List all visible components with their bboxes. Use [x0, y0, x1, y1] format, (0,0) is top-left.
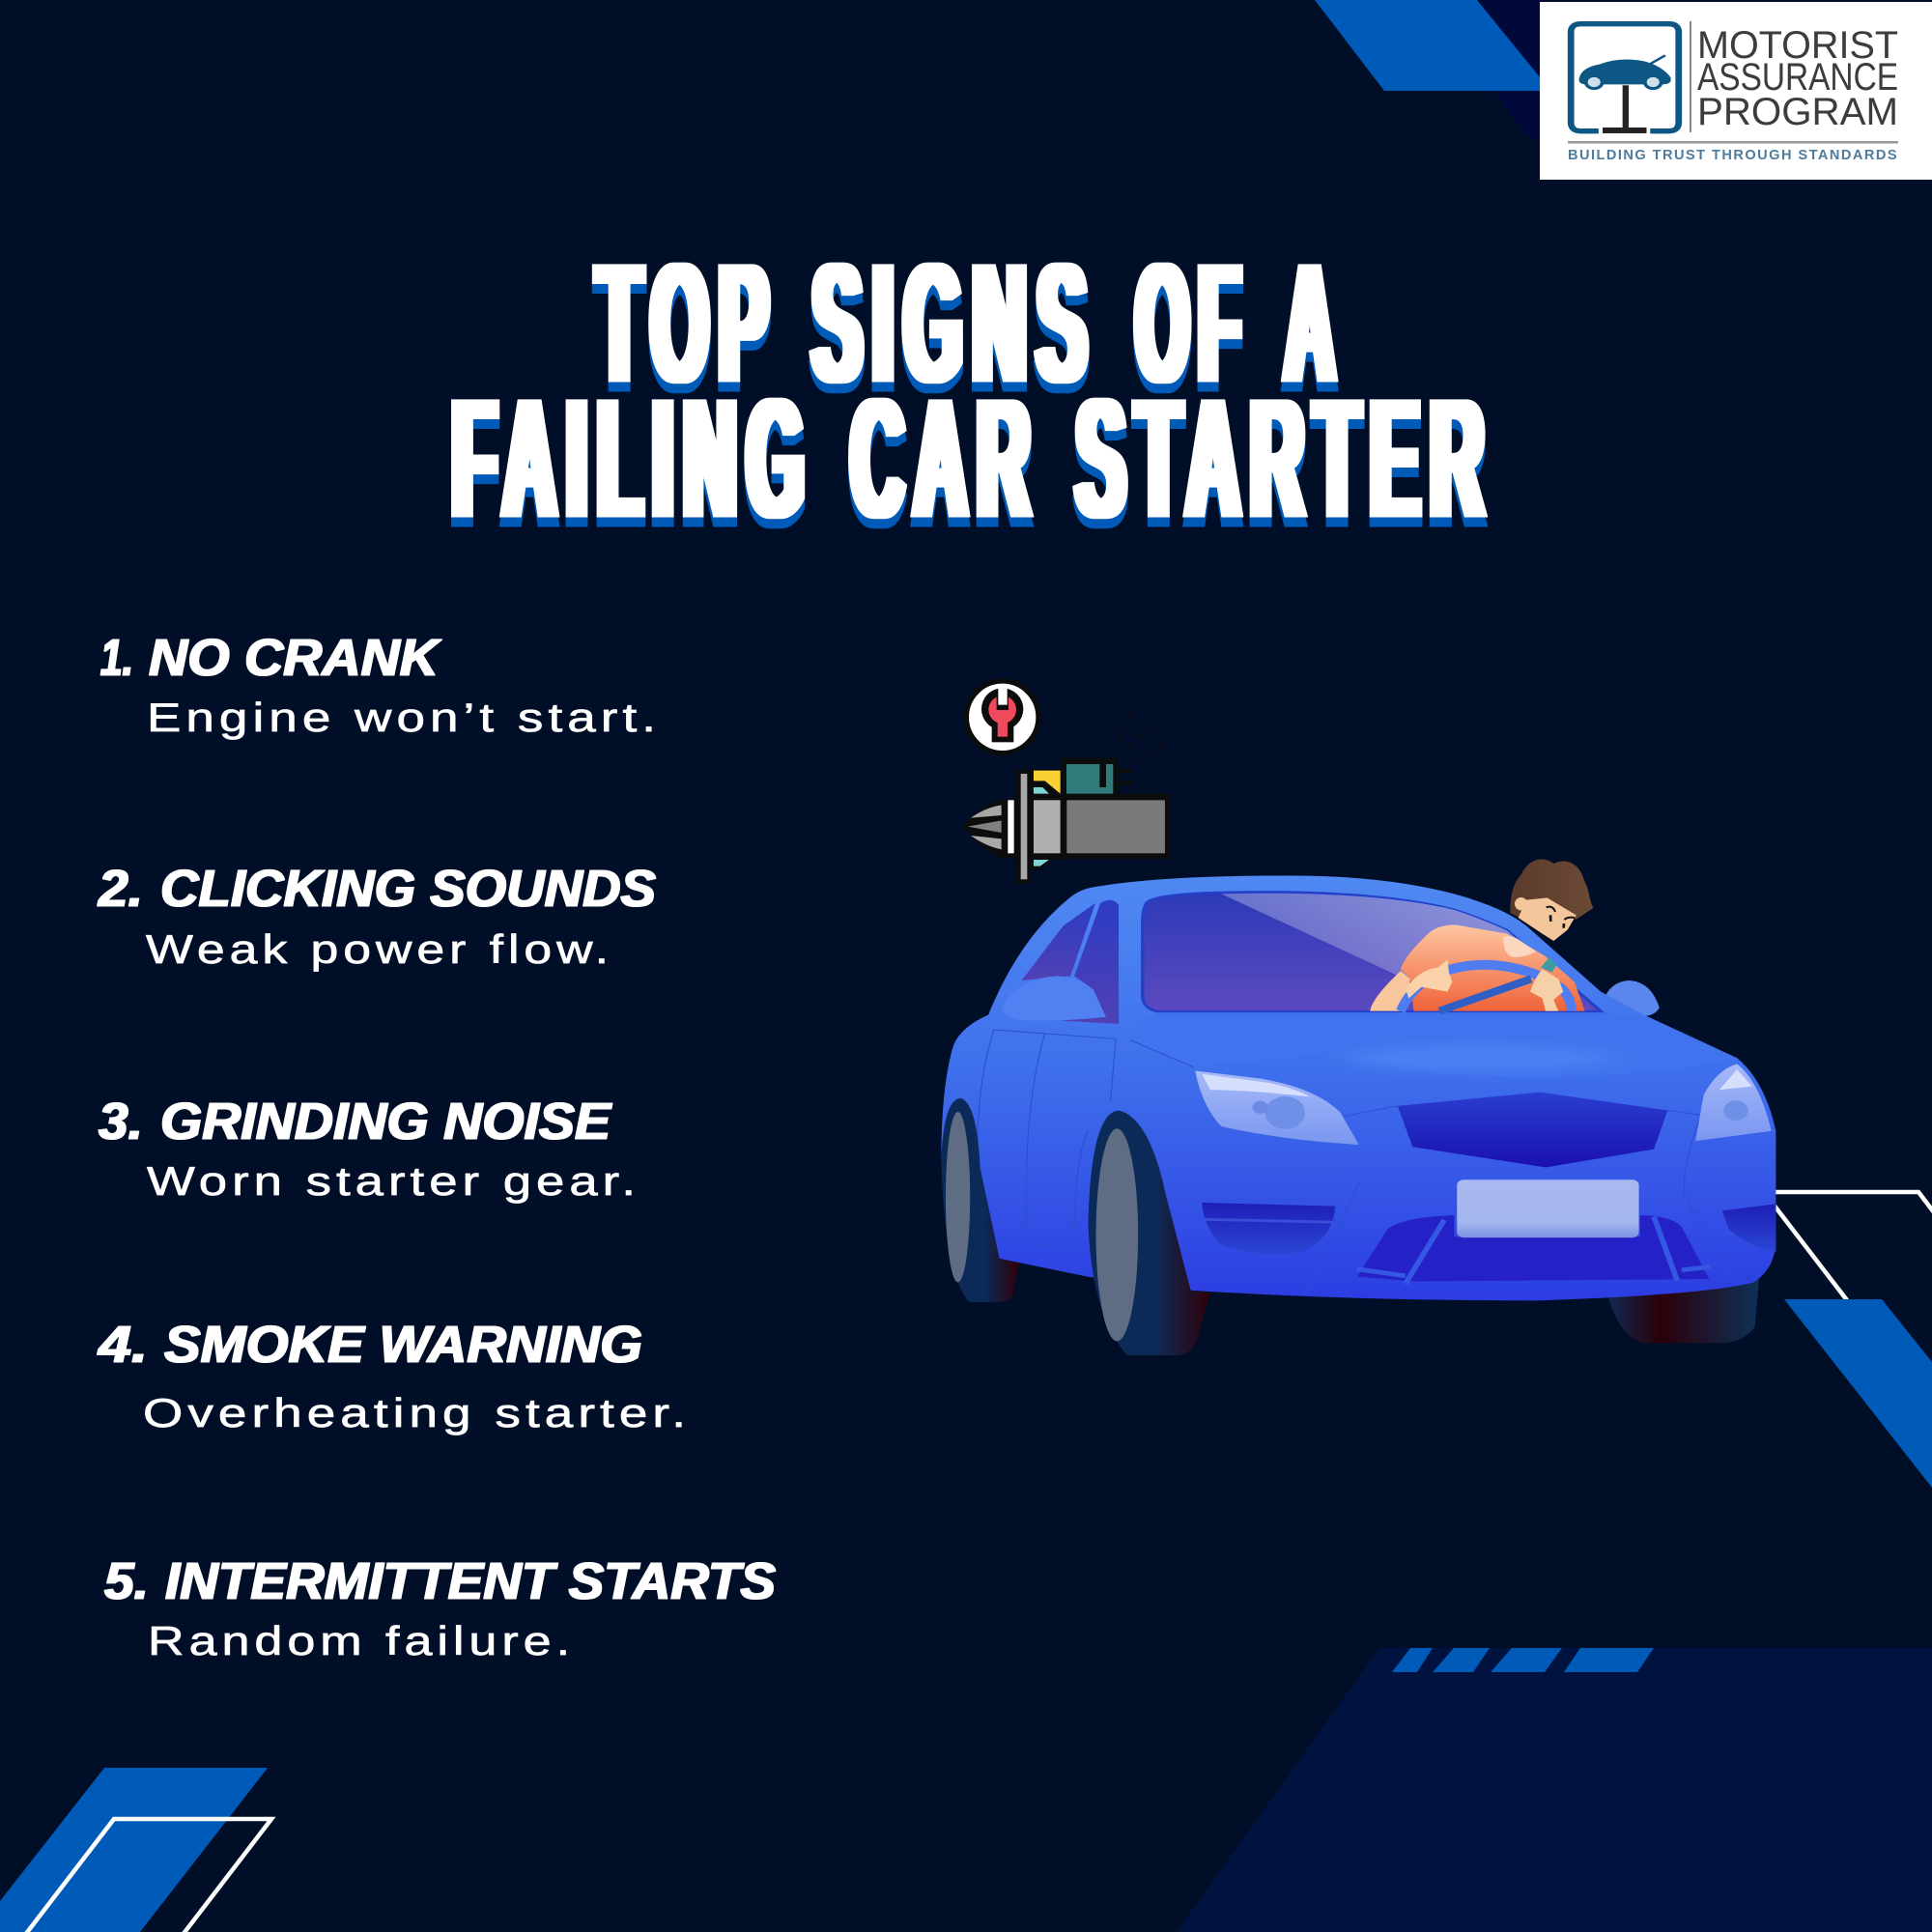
body crease lines	[978, 1030, 1729, 1295]
front wheel	[1088, 1111, 1210, 1355]
side window front	[1061, 900, 1119, 1024]
decor: bottom right navy panel	[1177, 1648, 1932, 1932]
right fog light	[1722, 1204, 1776, 1252]
sign 2: Weak power flow.	[146, 926, 613, 972]
decor: top right shapes	[1315, 0, 1546, 140]
sign 1: Engine won’t start.	[147, 695, 661, 740]
car illustration	[941, 875, 1776, 1355]
windshield	[1143, 893, 1602, 1011]
right headlight	[1695, 1064, 1772, 1141]
logo wordmark: PROGRAM	[1697, 91, 1898, 133]
left mirror	[1003, 976, 1106, 1020]
title: SIGNS	[812, 229, 1097, 418]
sign 5: INTERMITTENT STARTS	[165, 1552, 776, 1610]
icon: wrench badge	[966, 681, 1038, 753]
decor: bottom right stripes	[1392, 1648, 1654, 1672]
sign 3: Worn starter gear.	[147, 1158, 640, 1204]
logo panel	[1540, 2, 1932, 180]
decor: bottom left shapes	[0, 1768, 271, 1932]
logo wordmark: MOTORIST	[1697, 24, 1898, 67]
sign 5: Random failure.	[148, 1618, 575, 1663]
left fog light	[1202, 1203, 1335, 1254]
logo wordmark: ASSURANCE	[1697, 56, 1898, 99]
rear wheel	[941, 1098, 1019, 1302]
windshield reflection	[1221, 894, 1538, 1004]
title: TOP	[597, 229, 779, 418]
sign 1	[100, 629, 661, 740]
sign 1: NO CRANK	[149, 629, 442, 687]
sign 5: 5.	[104, 1552, 149, 1610]
sign 3: 3.	[99, 1093, 143, 1151]
logo wordmark	[1697, 24, 1898, 133]
lower bumper grille	[1357, 1215, 1711, 1284]
hood highlight	[1349, 1044, 1615, 1071]
sign 2: CLICKING SOUNDS	[160, 860, 656, 918]
title	[452, 229, 1494, 554]
logo tagline: BUILDING TRUST THROUGH STANDARDS	[1568, 147, 1898, 163]
driver torso and steering wheel	[1370, 924, 1585, 1011]
title: A	[1285, 229, 1345, 418]
sign 4: 4.	[98, 1316, 148, 1374]
grille	[1398, 1093, 1667, 1168]
sign 4	[98, 1316, 691, 1435]
icon: starter motor	[963, 712, 1171, 884]
far rear tire	[1606, 1277, 1759, 1343]
car body	[941, 875, 1776, 1300]
logo icon: car on lift	[1571, 24, 1679, 133]
decor: right side lines and blue slab	[1774, 1192, 1932, 1488]
sign 2: 2.	[98, 860, 143, 918]
sign 4: SMOKE WARNING	[164, 1316, 642, 1374]
left headlight	[1195, 1070, 1359, 1145]
sign 3: GRINDING NOISE	[160, 1093, 612, 1151]
sign 2	[98, 860, 656, 972]
sign 3	[99, 1093, 640, 1204]
hood	[1130, 1012, 1737, 1077]
title: FAILING	[452, 364, 814, 554]
title: OF	[1136, 229, 1250, 418]
title: CAR	[851, 364, 1040, 554]
sign 1: 1.	[100, 629, 133, 687]
sign 4: Overheating starter.	[143, 1390, 691, 1435]
side window rear	[1022, 903, 1095, 980]
driver head	[1510, 860, 1593, 941]
licence plate	[1457, 1179, 1639, 1237]
right mirror	[1605, 980, 1660, 1016]
sign 5	[104, 1552, 776, 1663]
